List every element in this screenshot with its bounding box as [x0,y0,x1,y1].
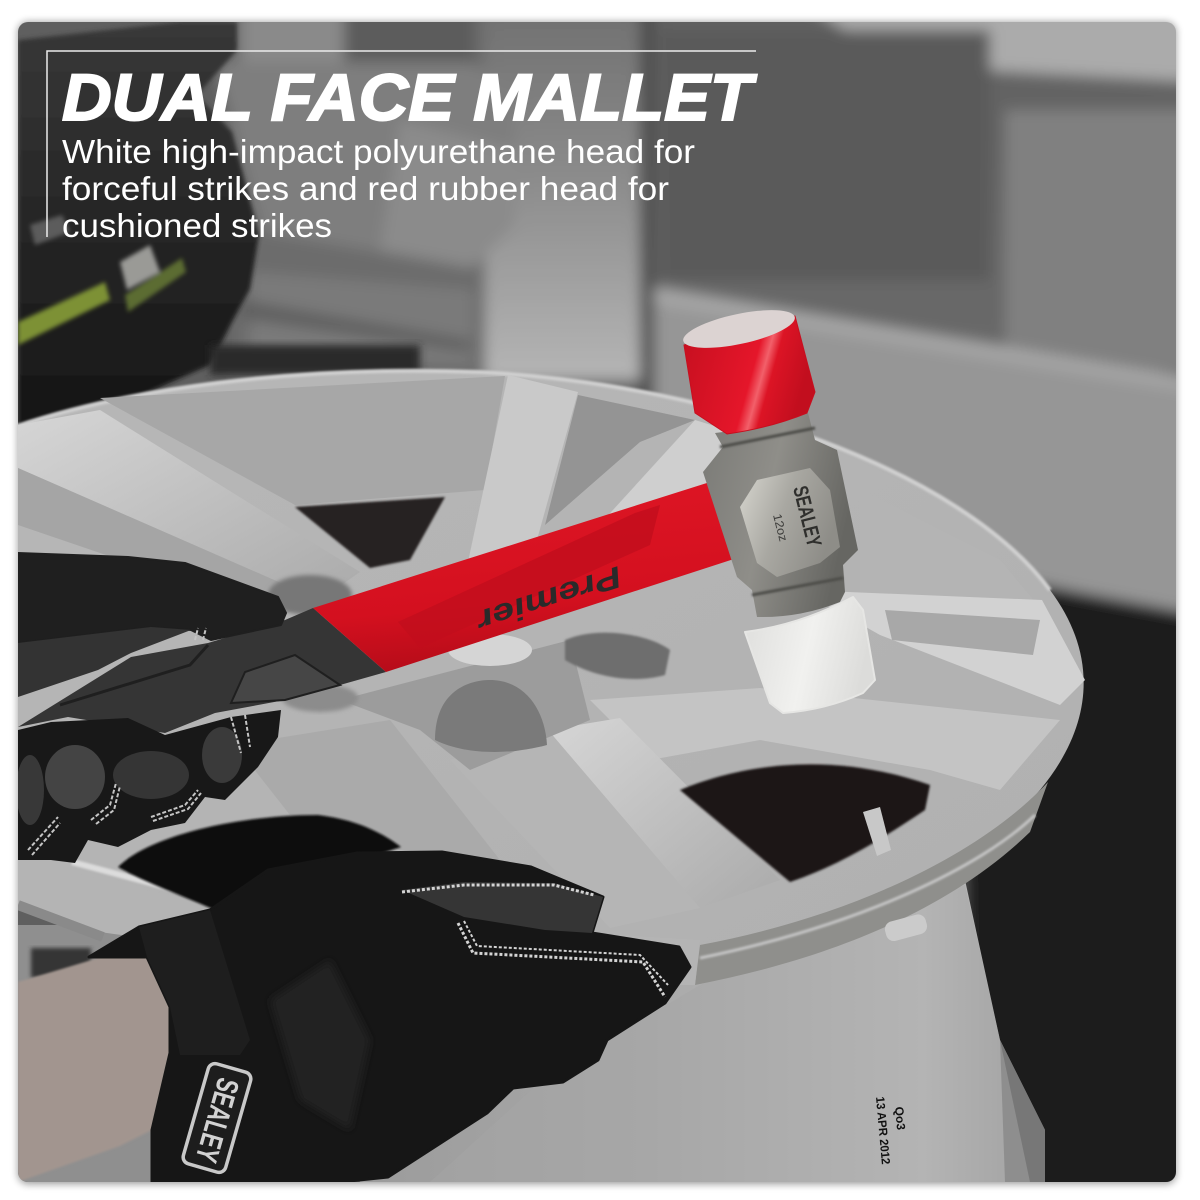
glove logo: SEALEY [189,1074,246,1167]
gloved upper hand [16,553,286,863]
spoke: upper centre [468,375,578,565]
spoke: upper left [18,410,239,535]
wheel holes [295,497,445,568]
valve stem [863,807,891,856]
steel head [703,413,858,617]
description: forceful strikes and red rubber head for [62,170,669,207]
lower left plate [235,720,500,860]
hub [340,640,590,770]
white polyurethane face [745,597,875,713]
tyre stamp [876,1097,906,1164]
wheel bolt [885,914,927,941]
tyre stamp: 13 APR 2012 [873,1096,893,1165]
red handle [313,482,737,672]
barrel [360,883,1045,1182]
red rubber face [680,302,815,434]
title: DUAL FACE MALLET [62,60,757,134]
head face [740,468,840,577]
forearm [18,950,170,1182]
gloved lower hand [89,852,690,1182]
rim lip [0,371,1050,590]
spoke: right [860,490,1050,620]
handle logo: Premier [470,559,626,638]
centre dome [435,680,547,752]
description: cushioned strikes [62,207,332,244]
glove mesh thumb [402,882,603,933]
case logo [18,215,186,345]
head marking: SEALEY [788,484,825,549]
description [62,133,695,244]
upper plate [100,376,505,505]
rim body [0,371,1084,985]
glove stitching [402,885,668,997]
box and shelf [232,234,486,368]
title frame [47,51,756,237]
floor [966,581,1176,1182]
black handle grip [18,608,386,733]
tyre stamp: Qo3 [892,1106,908,1131]
spoke: lower right [590,688,1060,790]
weight marking: 12oz [770,512,790,543]
column [482,0,640,380]
glove stitching [28,628,250,855]
black case, left [18,22,420,432]
right wall [726,284,998,336]
mallet [18,302,875,733]
centre cap [448,634,532,666]
alloy wheel [0,371,1085,1185]
wrist strap [182,1062,252,1174]
description: White high-impact polyurethane head for [62,133,695,170]
